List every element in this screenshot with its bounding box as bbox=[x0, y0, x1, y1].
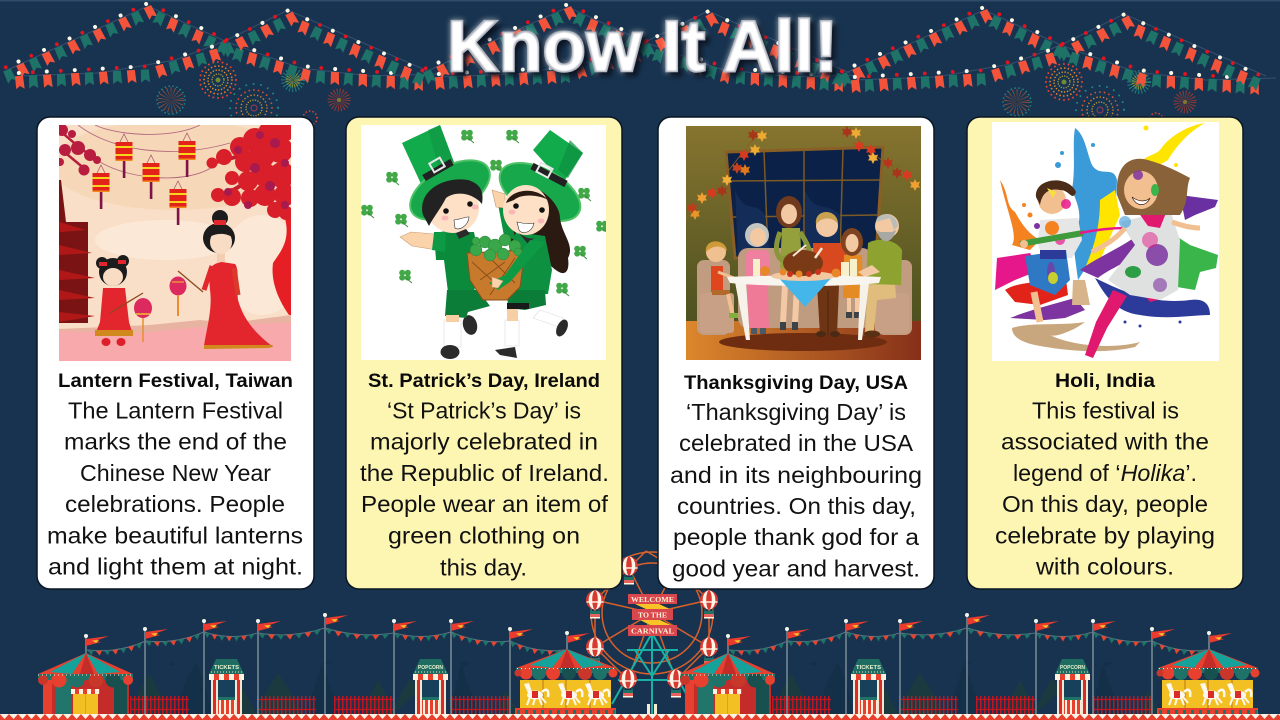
balloon cabins bbox=[586, 556, 718, 698]
caption: Holi: On this day, people bbox=[1002, 491, 1208, 517]
caption: St. Patrick's Day bbox=[360, 370, 609, 580]
boy leprechaun bbox=[400, 125, 500, 359]
big top tent right bbox=[680, 653, 775, 714]
bunting right bbox=[837, 4, 1276, 95]
roast turkey bbox=[760, 245, 840, 281]
carnival fairground left bbox=[84, 613, 590, 714]
carnival fairground right bbox=[726, 613, 1232, 714]
title: Know It All! bbox=[447, 7, 838, 87]
caption: Thanksgiving Day: countries. On this day, bbox=[677, 493, 916, 519]
caption: St. Patrick's Day: green clothing on bbox=[388, 522, 580, 548]
illustration: St. Patrick's Day bbox=[361, 125, 609, 360]
panel: Thanksgiving Day bbox=[658, 117, 934, 589]
caption: St. Patrick's Day: People wear an item of bbox=[361, 491, 608, 517]
illustration: Thanksgiving Day bbox=[686, 126, 921, 360]
panel: Lantern Festival bbox=[37, 117, 314, 589]
welcome banners: TO THE bbox=[638, 610, 667, 619]
sofa and armchairs bbox=[697, 248, 912, 335]
welcome banners bbox=[628, 594, 677, 636]
caption: Holi: celebrate by playing bbox=[995, 522, 1215, 548]
bunting centre bbox=[421, 1, 860, 92]
tickets booth left: TICKETS bbox=[214, 665, 239, 671]
autumn leaf garlands bbox=[686, 126, 920, 220]
tickets booth right bbox=[851, 659, 886, 718]
caption: Thanksgiving Day: celebrated in the USA bbox=[679, 430, 913, 456]
pagoda bbox=[59, 180, 95, 323]
basket of shamrocks bbox=[467, 234, 545, 300]
panel: St. Patrick's Day bbox=[346, 117, 622, 589]
window bbox=[726, 147, 883, 258]
caption: St. Patrick's Day: ‘St Patrick’s Day’ is bbox=[387, 398, 581, 424]
fireworks left bbox=[157, 62, 345, 132]
caption: Lantern Festival: Lantern Festival, Taiwan bbox=[58, 370, 293, 392]
paint splashes bbox=[995, 123, 1218, 351]
popcorn booth right: POPCORN bbox=[1060, 665, 1085, 671]
caption: Thanksgiving Day: good year and harvest. bbox=[672, 556, 920, 582]
popcorn booth left: POPCORN bbox=[418, 665, 443, 671]
caption: Lantern Festival: marks the end of the bbox=[64, 428, 287, 454]
tickets booth right: TICKETS bbox=[856, 665, 881, 671]
caption: Thanksgiving Day bbox=[670, 372, 922, 582]
caption: St. Patrick's Day: this day. bbox=[440, 554, 527, 580]
caption: St. Patrick's Day: St. Patrick’s Day, Ireland bbox=[368, 370, 600, 392]
illustration: Lantern Festival bbox=[59, 125, 291, 361]
panel: Holi bbox=[967, 117, 1243, 589]
tickets booth left bbox=[209, 659, 244, 718]
girl leprechaun bbox=[490, 130, 590, 358]
wheel support legs bbox=[612, 633, 692, 714]
bunting left bbox=[1, 0, 440, 91]
boy with water gun bbox=[1020, 180, 1125, 322]
caption: Lantern Festival: and light them at night. bbox=[48, 554, 303, 580]
caption: St. Patrick's Day: the Republic of Ireland. bbox=[360, 460, 609, 486]
dining table bbox=[727, 276, 881, 340]
blossom tree bbox=[56, 119, 296, 315]
caption: St. Patrick's Day: majorly celebrated in bbox=[370, 428, 598, 454]
caption: Thanksgiving Day: Thanksgiving Day, USA bbox=[684, 372, 908, 394]
popcorn booth left bbox=[413, 659, 448, 718]
zigzag ground bbox=[0, 714, 1280, 720]
girl dancing bbox=[1085, 159, 1200, 358]
caption: Lantern Festival: Chinese New Year bbox=[80, 460, 271, 486]
caption: Holi: associated with the bbox=[1001, 428, 1209, 454]
caption: Lantern Festival bbox=[47, 370, 303, 580]
caption: Holi: legend of ‘Holika’. bbox=[1013, 460, 1197, 486]
family of six bbox=[706, 196, 902, 338]
girl with lantern bbox=[95, 255, 152, 346]
caption: Holi: This festival is bbox=[1032, 398, 1179, 424]
caption: Thanksgiving Day: people thank god for a bbox=[673, 524, 920, 550]
welcome banners: WELCOME bbox=[631, 595, 674, 604]
caption: Holi: Holi, India bbox=[1055, 370, 1155, 392]
caption: Holi bbox=[995, 370, 1215, 580]
woman with lantern bbox=[170, 210, 273, 349]
caption: Lantern Festival: The Lantern Festival bbox=[68, 398, 283, 424]
big top tent left bbox=[38, 653, 133, 714]
welcome banners: CARNIVAL bbox=[631, 626, 674, 635]
caption: Thanksgiving Day: ‘Thanksgiving Day’ is bbox=[686, 399, 906, 425]
fireworks right bbox=[1003, 64, 1191, 134]
candles bbox=[753, 259, 857, 276]
illustration: Holi bbox=[992, 122, 1219, 361]
ferris wheel bbox=[586, 551, 718, 714]
carousel left bbox=[514, 649, 618, 715]
wheel frame bbox=[591, 551, 713, 680]
caption: Thanksgiving Day: and in its neighbouring bbox=[670, 462, 922, 488]
caption: Holi: with colours. bbox=[1035, 554, 1174, 580]
caption: Lantern Festival: celebrations. People bbox=[65, 491, 285, 517]
popcorn booth right bbox=[1055, 659, 1090, 718]
caption: Lantern Festival: make beautiful lanterns bbox=[47, 522, 303, 548]
carousel right bbox=[1156, 649, 1260, 715]
